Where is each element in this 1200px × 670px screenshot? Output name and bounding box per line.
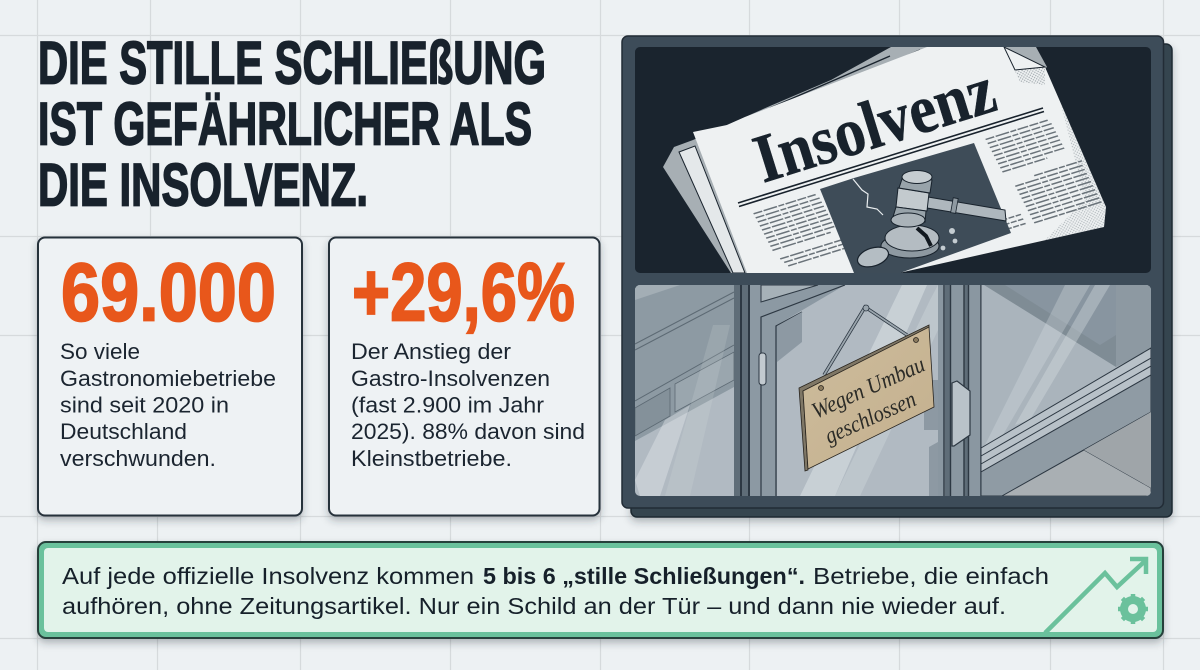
head: [896, 188, 929, 211]
title: IST GEFÄHRLICHER ALS: [38, 90, 532, 158]
stat description: [60, 339, 276, 471]
icon: gear: [1118, 594, 1148, 624]
floor rail: [981, 348, 1151, 472]
callout text: Auf jede offizielle Insolvenz kommen: [62, 563, 474, 589]
stat description: Gastronomiebetriebe: [60, 366, 276, 391]
title: [38, 30, 546, 218]
wooden sign: Wegen Umbau: [808, 352, 929, 424]
wooden sign: [799, 325, 934, 471]
sound block: [880, 240, 940, 258]
stat description: verschwunden.: [60, 446, 216, 471]
pocket watch: [857, 246, 890, 268]
crack: [853, 179, 883, 215]
right cabinet and floor: [982, 285, 1152, 496]
small back panel: [777, 312, 802, 362]
icon: rising arrow: [1045, 559, 1146, 633]
panel: illustration frame: [622, 36, 1172, 517]
stat description: sind seit 2020 in: [60, 392, 229, 418]
panel: stat +29,6%: [329, 238, 600, 516]
stat description: Der Anstieg der: [351, 339, 511, 364]
title: DIE STILLE SCHLIEßUNG: [38, 30, 546, 96]
left cabinet: [635, 285, 734, 441]
stat description: Deutschland: [60, 419, 187, 444]
illustration: newspaper Insolvenz: [635, 47, 1151, 297]
headline: Insolvenz: [745, 51, 1004, 197]
callout text: 5 bis 6 „stille Schließungen“.: [483, 563, 805, 589]
sign rope: [824, 307, 907, 375]
rule: [738, 108, 1044, 206]
corner fold: [1004, 47, 1045, 70]
right frame back bits: [924, 380, 938, 430]
wooden sign: geschlossen: [821, 386, 920, 449]
block crack: [917, 228, 931, 246]
newspaper text columns: [753, 120, 1102, 267]
stat description: 2025). 88% davon sind: [351, 419, 585, 444]
fragments: [941, 228, 957, 250]
stat description: (fast 2.900 im Jahr: [351, 392, 544, 418]
door frame left: [734, 285, 748, 496]
stat description: So viele: [60, 339, 140, 364]
back sheets: [663, 47, 1047, 273]
mullion: [938, 285, 981, 496]
door frame: [750, 285, 845, 496]
callout text: [62, 563, 1049, 619]
front page: [693, 47, 1106, 273]
panel: stat 69.000: [38, 238, 302, 516]
stat description: [351, 339, 585, 471]
title: DIE INSOLVENZ.: [38, 152, 368, 218]
callout: [38, 542, 1163, 638]
hinge: [759, 353, 766, 385]
handle: [927, 197, 1006, 221]
stat description: Gastro-Insolvenzen: [351, 366, 550, 391]
stat description: Kleinstbetriebe.: [351, 446, 512, 471]
door handle: [952, 381, 970, 446]
illustration: closed shop door with sign: [635, 285, 1152, 496]
stat number: 69.000: [61, 246, 276, 338]
photo with gavel: [820, 143, 1011, 273]
callout text: aufhören, ohne Zeitungsartikel. Nur ein Schild an der Tür – und dann nie wieder auf.: [62, 593, 1006, 619]
glass streaks centre: [800, 285, 927, 496]
left light streaks: [689, 325, 730, 412]
callout text: Betriebe, die einfach: [813, 563, 1049, 589]
stat number: +29,6%: [352, 246, 575, 338]
